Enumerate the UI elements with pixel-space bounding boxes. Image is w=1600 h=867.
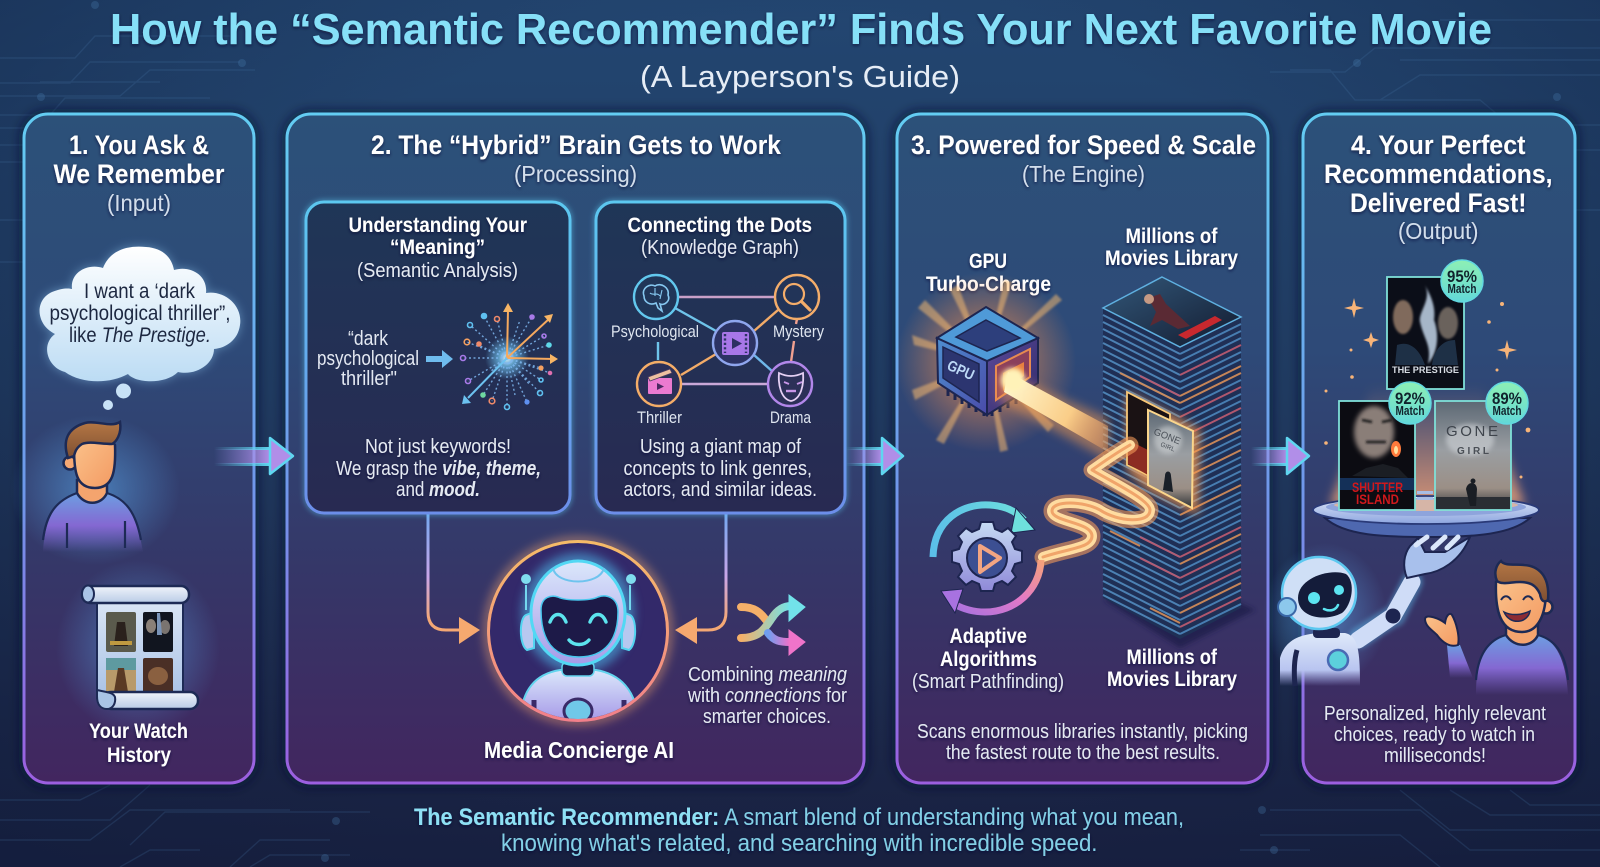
poster: gone girl — [1435, 401, 1511, 510]
badge: 95 percent match: 95% — [1447, 267, 1477, 286]
chart: movie library stack — [1103, 277, 1255, 648]
text: not just keywords: We grasp the vibe, theme, — [336, 458, 541, 480]
top poster — [1103, 277, 1241, 347]
label: millions of movies top: Movies Library — [1105, 247, 1238, 270]
query text: “dark — [348, 328, 389, 350]
text: combining meaning: Combining meaning — [688, 664, 847, 686]
heading: connecting the dots: (Knowledge Graph) — [641, 237, 799, 259]
label: media concierge: Media Concierge AI — [484, 737, 674, 763]
heading: understanding your meaning: (Semantic Analysis) — [357, 260, 518, 282]
node: thriller — [637, 362, 681, 406]
caption: The Semantic Recommender: A smart blend of understanding what you mean, — [414, 804, 1184, 831]
node: film center — [713, 321, 757, 365]
subtitle: (A Layperson's Guide) — [640, 59, 960, 94]
text: scans libraries: Scans enormous libraries instantly, picking — [917, 721, 1248, 743]
connector lines to concierge — [428, 514, 726, 644]
icon: person — [10, 415, 180, 565]
badge: 89 percent match: Match — [1492, 404, 1522, 418]
icon: happy user — [1425, 561, 1568, 695]
poster: the prestige: THE PRESTIGE — [1392, 365, 1459, 376]
icon: shuffle merge — [741, 595, 805, 655]
label: your watch history: Your Watch — [89, 720, 188, 743]
node: mystery — [775, 275, 819, 319]
text: giant map — [624, 436, 817, 501]
label: your watch history — [89, 720, 188, 767]
text: personalized — [1324, 703, 1546, 767]
heading: understanding your meaning: Understanding Your — [348, 214, 527, 237]
icon: gpu chip: GPU — [944, 357, 977, 384]
heading: panel 1: 1. You Ask & — [69, 130, 209, 160]
heading: panel 2 — [371, 130, 782, 187]
text: giant map: concepts to link genres, — [624, 458, 812, 480]
title: How the “Semantic Recommender” Finds Your Next Favorite Movie — [110, 5, 1492, 54]
text: combining meaning: with connections for — [687, 685, 847, 707]
icon: serving robot — [1263, 537, 1470, 687]
label: adaptive algorithms: Adaptive — [950, 625, 1027, 648]
panel: semantic analysis — [306, 202, 570, 513]
label: millions of movies top: Millions of — [1126, 225, 1218, 248]
thought text: like The Prestige. — [69, 324, 211, 347]
text: personalized: Personalized, highly relevant — [1324, 703, 1546, 725]
heading: panel 2: (Processing) — [514, 161, 637, 187]
heading: understanding your meaning: “Meaning” — [390, 236, 485, 259]
heading: panel 4: Delivered Fast! — [1350, 188, 1526, 218]
arrow: input to processing — [214, 438, 293, 474]
heading: panel 4: (Output) — [1398, 218, 1478, 244]
arrow: smart path route — [1043, 445, 1150, 557]
caption — [414, 804, 1184, 857]
badge: 95 percent match: Match — [1448, 282, 1476, 296]
heading: panel 4: Recommendations, — [1324, 159, 1552, 189]
badge: 92 percent match — [1389, 382, 1431, 424]
highlighted posters — [1127, 392, 1200, 515]
text: giant map: actors, and similar ideas. — [624, 479, 817, 501]
panel: 3 engine — [896, 114, 1268, 783]
thought text: psychological thriller”, — [50, 302, 230, 325]
badge: 92 percent match: 92% — [1395, 389, 1425, 408]
label: millions of movies bottom: Movies Library — [1107, 668, 1237, 691]
heading: panel 1 — [54, 130, 225, 216]
poster: shutter island — [1339, 401, 1415, 510]
heading: connecting the dots: Connecting the Dots — [628, 214, 812, 237]
text: personalized: milliseconds! — [1384, 745, 1486, 767]
text: scans libraries: the fastest route to the best results. — [946, 742, 1220, 764]
label: gpu turbo-charge: Turbo-Charge — [926, 273, 1051, 296]
heading: panel 4 — [1324, 130, 1552, 244]
node labels: Drama — [770, 408, 811, 427]
badge: 95 percent match — [1441, 260, 1483, 302]
text: scans libraries — [917, 721, 1248, 764]
heading: connecting the dots — [628, 214, 812, 259]
highlighted posters: GIRL — [1159, 441, 1176, 454]
badge: 92 percent match: Match — [1396, 404, 1424, 418]
panel: 4 output — [1263, 114, 1575, 783]
text: combining meaning — [687, 664, 847, 728]
text: not just keywords: Not just keywords! — [365, 436, 511, 458]
chart: semantic vector burst — [460, 303, 558, 410]
label: millions of movies bottom: Millions of — [1126, 646, 1218, 669]
node labels: Psychological — [611, 322, 699, 341]
heading: panel 1: (Input) — [107, 190, 171, 216]
arrow: query to vectors — [426, 350, 453, 368]
heading: understanding your meaning — [348, 214, 527, 282]
tray glow and sparkles — [1324, 298, 1530, 505]
node labels: Mystery — [773, 322, 824, 341]
thought text: I want a ‘dark — [84, 280, 195, 303]
badge: 89 percent match: 89% — [1492, 389, 1522, 408]
poster: the prestige — [1387, 277, 1464, 389]
node labels: Thriller — [637, 408, 682, 427]
poster: shutter island: ISLAND — [1356, 491, 1399, 507]
badge: 89 percent match — [1486, 382, 1528, 424]
label: gpu turbo-charge: GPU — [969, 250, 1007, 273]
panel: 1 input — [10, 114, 254, 783]
node: drama — [768, 362, 812, 406]
caption: knowing what's related, and searching with incredible speed. — [501, 830, 1098, 857]
label: adaptive algorithms: (Smart Pathfinding) — [912, 671, 1064, 693]
poster: gone girl: GIRL — [1457, 446, 1489, 457]
text: not just keywords: and mood. — [396, 479, 480, 501]
thought text — [50, 280, 230, 347]
text: personalized: choices, ready to watch in — [1334, 724, 1535, 746]
icon: adaptive algorithm gear — [933, 505, 1041, 613]
panel: 2 processing — [287, 114, 864, 783]
label: adaptive algorithms — [912, 625, 1064, 693]
highlighted posters: GONE — [1152, 427, 1182, 447]
node: psychological — [634, 275, 678, 319]
icon: serving tray — [1313, 491, 1539, 537]
thought cloud — [40, 247, 240, 410]
query text: thriller" — [341, 368, 397, 390]
icon: watch history scroll — [56, 560, 220, 736]
text: combining meaning: smarter choices. — [703, 706, 831, 728]
label: millions of movies top — [1105, 225, 1238, 270]
poster: gone girl: GONE — [1446, 423, 1498, 440]
arrow: engine to output — [1251, 438, 1309, 474]
chart: knowledge graph network — [611, 275, 824, 427]
panel: knowledge graph — [596, 202, 845, 513]
label: millions of movies bottom — [1107, 646, 1237, 691]
label: your watch history: History — [107, 744, 171, 767]
heading: panel 3 — [911, 130, 1256, 187]
heading: panel 2: 2. The “Hybrid” Brain Gets to Work — [371, 130, 782, 160]
arrow: processing to engine — [846, 438, 903, 474]
poster: shutter island: SHUTTER — [1352, 479, 1403, 495]
query text: psychological — [317, 348, 419, 370]
icon: gpu chip — [896, 272, 1112, 462]
label: gpu turbo-charge — [926, 250, 1051, 296]
node labels — [611, 322, 824, 427]
text: not just keywords — [336, 436, 541, 501]
query text — [317, 328, 419, 390]
heading: panel 3: 3. Powered for Speed & Scale — [911, 130, 1256, 160]
heading: panel 3: (The Engine) — [1022, 161, 1145, 187]
icon: media concierge robot — [488, 541, 668, 723]
text: giant map: Using a giant map of — [640, 436, 801, 458]
heading: panel 1: We Remember — [54, 159, 225, 189]
label: adaptive algorithms: Algorithms — [940, 648, 1037, 671]
heading: panel 4: 4. Your Perfect — [1351, 130, 1526, 160]
